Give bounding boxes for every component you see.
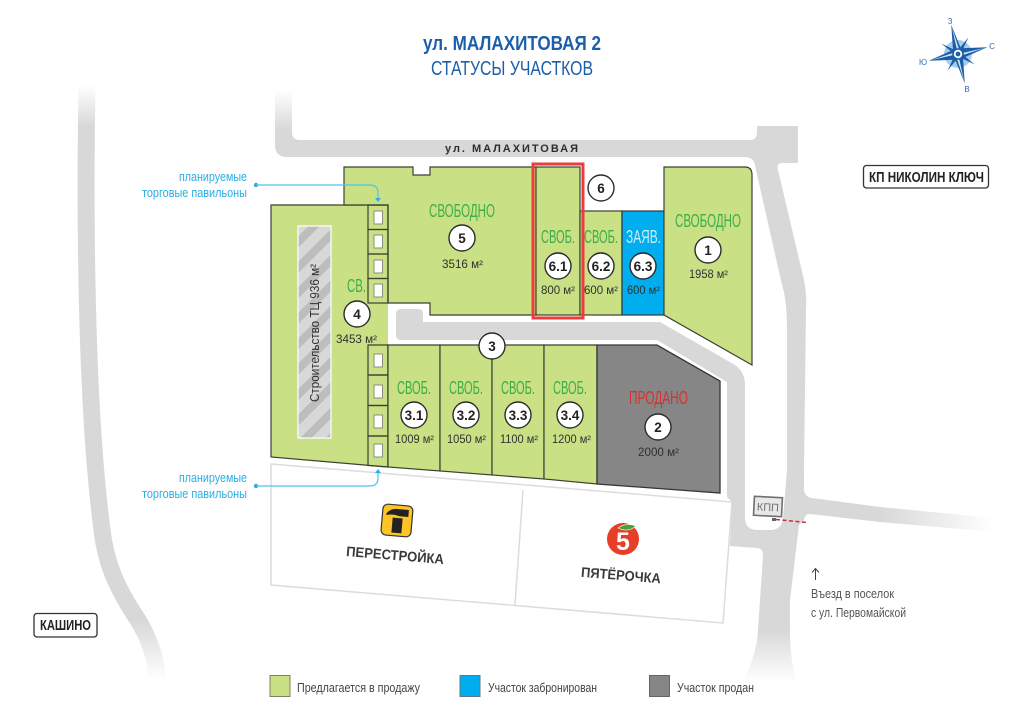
number badge: 3.2 [457, 408, 475, 423]
label: Кашино: КАШИНО [40, 618, 91, 634]
area: 2000 м² [638, 447, 679, 459]
plot 3.2 [440, 345, 492, 475]
number badge [545, 253, 571, 279]
area: 1200 м² [552, 434, 591, 446]
area: 3453 м² [336, 334, 377, 346]
title: ул. МАЛАХИТОВАЯ 2 [423, 33, 601, 55]
plot 3.4 [544, 345, 597, 484]
barrier [772, 518, 776, 521]
plot 1 [664, 167, 752, 365]
number badge: 4 [353, 307, 361, 322]
area: 600 м² [584, 285, 618, 297]
plot outline [271, 464, 732, 623]
entrance note: с ул. Первомайской [811, 605, 906, 620]
planned pavilions: upper column [368, 205, 388, 303]
area: 3516 м² [442, 259, 483, 271]
area: 1050 м² [447, 434, 486, 446]
number badge: plot 3 [479, 333, 505, 359]
legend item: reserved [460, 676, 597, 696]
status: СВОБ. [541, 227, 575, 247]
callout: upper planned pavilions: планируемые [179, 169, 247, 184]
status: СВОБОДНО [675, 211, 741, 231]
planned pavilions: lower column [368, 345, 388, 467]
plot 2 [597, 345, 720, 493]
status: ПРОДАНО [629, 388, 688, 408]
plot 6.3 [622, 211, 664, 315]
road: left highway [86, 85, 157, 682]
status: СВОБ. [449, 378, 483, 398]
icon: Пятёрочка logo: 5 [616, 528, 630, 556]
status: СВОБ. [553, 378, 587, 398]
icon: Пятёрочка logo [607, 523, 639, 556]
callout: lower planned pavilions: торговые павильоны [142, 486, 247, 501]
area: 1958 м² [689, 269, 728, 281]
title [423, 33, 601, 80]
number badge: 3.3 [509, 408, 528, 423]
checkpoint КПП: КПП [757, 501, 779, 515]
label: КП Николин Ключ: КП НИКОЛИН КЛЮЧ [869, 170, 984, 186]
number badge: 5 [458, 231, 466, 246]
checkpoint КПП [753, 496, 807, 522]
label: Пятёрочка: ПЯТЁРОЧКА [580, 564, 662, 586]
callout: lower planned pavilions: планируемые [179, 470, 247, 485]
plot divider [515, 490, 523, 605]
road: top left spur [275, 90, 760, 157]
number badge: plot 3: 3 [488, 339, 496, 354]
number badge: plot 6 [588, 175, 614, 201]
icon: compass rose: Ю [919, 58, 927, 67]
legend item: for sale: Предлагается в продажу [297, 680, 420, 695]
highlight frame: plot 6.1 [533, 164, 583, 318]
number badge: 6.1 [549, 259, 568, 274]
icon: Перестройка hammer [381, 504, 413, 537]
number badge: 3.1 [405, 408, 424, 423]
plot 4 [271, 205, 388, 467]
label: Кашино [34, 614, 97, 637]
area: 600 м² [627, 285, 660, 297]
icon: compass rose: З [948, 17, 953, 26]
plot: Перестройка and Пятёрочка land [271, 464, 732, 623]
callout: upper planned pavilions: торговые павильоны [142, 185, 247, 200]
label: Перестройка: ПЕРЕСТРОЙКА [346, 542, 445, 567]
status: СВОБ. [397, 378, 431, 398]
status: СВОБ. [584, 227, 618, 247]
number badge: 6.3 [634, 259, 653, 274]
label: street name: ул. МАЛАХИТОВАЯ [445, 143, 578, 155]
number badge: plot 6: 6 [597, 181, 605, 196]
plot 6.1 [536, 167, 580, 315]
number badge: 2 [654, 420, 662, 435]
status: СВОБОДНО [429, 201, 495, 221]
icon: compass rose: В [964, 85, 970, 94]
plot 5 [344, 167, 536, 315]
callout: lower planned pavilions [142, 469, 381, 501]
number badge [344, 301, 370, 327]
entrance note: Въезд в поселок [811, 586, 894, 601]
roads [86, 85, 995, 682]
status: ЗАЯВ. [626, 227, 661, 247]
label: КП Николин Ключ [864, 166, 988, 188]
legend [270, 676, 754, 696]
area: 1100 м² [500, 434, 538, 446]
arrow: entrance [812, 568, 819, 580]
status: СВОБ. [501, 378, 535, 398]
legend item: for sale [270, 676, 420, 696]
legend item: sold: Участок продан [677, 680, 754, 695]
title: СТАТУСЫ УЧАСТКОВ [431, 58, 593, 80]
area: 1009 м² [395, 434, 434, 446]
road: south fade [743, 630, 797, 682]
number badge [695, 237, 721, 263]
number badge [645, 414, 671, 440]
shopping centre construction [298, 226, 331, 438]
legend item: reserved: Участок забронирован [488, 680, 597, 695]
plot 3.3 [492, 345, 544, 479]
entrance note [811, 568, 906, 620]
plot 3.1 [388, 345, 440, 471]
status: СВ. [347, 276, 366, 296]
road: east branch fade [880, 507, 995, 532]
plot 6.2 [580, 211, 622, 315]
number badge: 3.4 [561, 408, 580, 423]
legend item: sold [650, 676, 754, 696]
icon: compass rose: С [989, 42, 995, 51]
area: 800 м² [541, 285, 575, 297]
shopping centre construction: Строительство ТЦ 936 м² [307, 263, 322, 402]
number badge [449, 225, 475, 251]
number badge: 1 [704, 243, 712, 258]
number badge: 6.2 [592, 259, 610, 274]
road: main road [396, 126, 880, 630]
icon: compass rose [919, 17, 995, 94]
callout: upper planned pavilions [142, 169, 381, 202]
